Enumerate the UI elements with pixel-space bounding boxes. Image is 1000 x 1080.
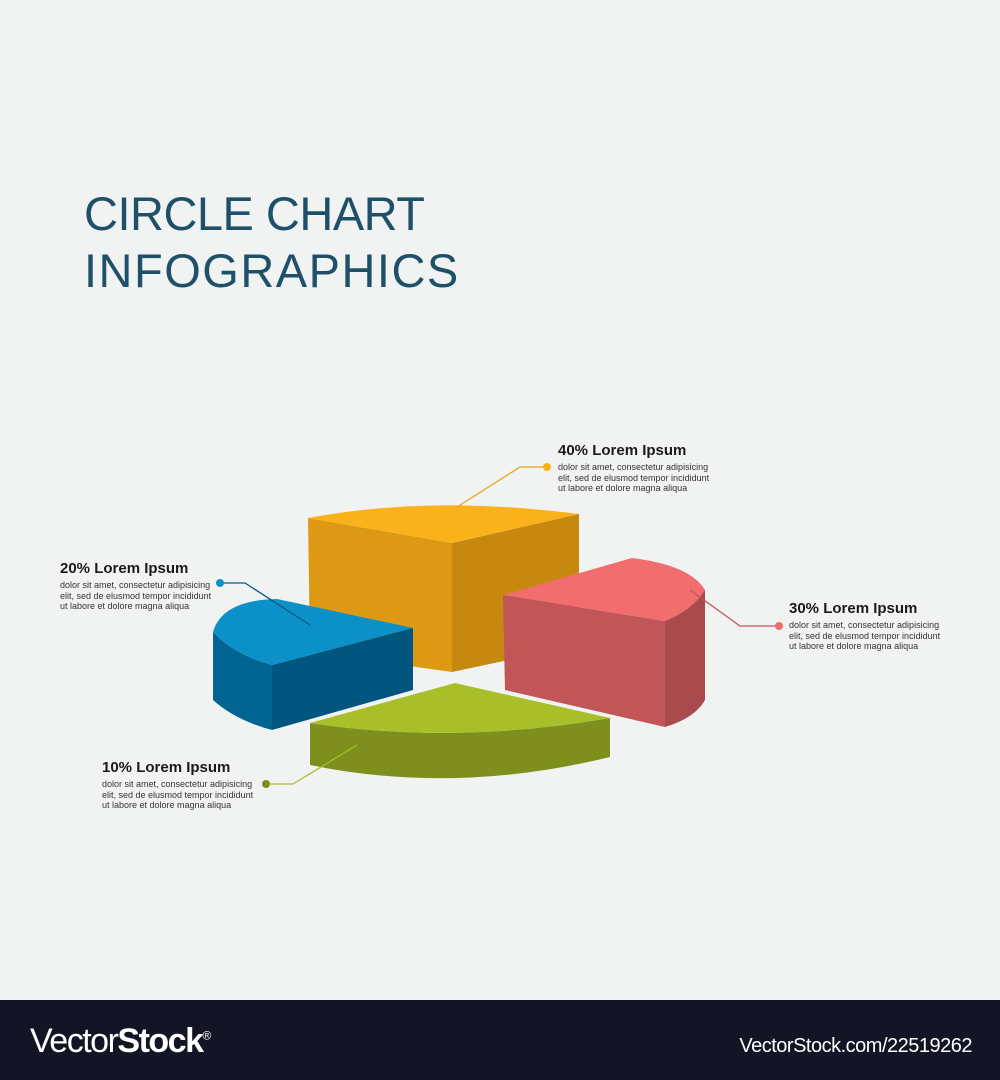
label 40%: dolor sit amet, consectetur adipisicing [558,462,708,472]
label 40%: ut labore et dolore magna aliqua [558,483,687,493]
slice: yellow 40% [308,505,579,672]
label 20% [60,560,212,611]
title: CIRCLE CHART [84,187,424,240]
label 10%: elit, sed de elusmod tempor incididunt [102,790,253,800]
label 20%: ut labore et dolore magna aliqua [60,601,189,611]
label 40% [558,442,710,493]
label 10%: 10% Lorem Ipsum [102,759,230,776]
label 20%: 20% Lorem Ipsum [60,560,188,577]
title: INFOGRAPHICS [84,244,460,297]
label 20%: elit, sed de elusmod tempor incididunt [60,590,211,600]
label 30%: 30% Lorem Ipsum [789,600,917,617]
label 10%: ut labore et dolore magna aliqua [102,800,231,810]
slice: green 10% [310,683,610,778]
footer bar: VectorStock.com/22519262 [739,1035,972,1057]
label 30% [789,600,940,651]
label 30%: ut labore et dolore magna aliqua [789,641,918,651]
connectors [220,467,779,784]
footer bar: VectorStock® [30,1022,210,1060]
title [84,187,460,297]
slice: red 30% [503,558,705,727]
label 30%: dolor sit amet, consectetur adipisicing [789,620,939,630]
label 20%: dolor sit amet, consectetur adipisicing [60,580,210,590]
label 30%: elit, sed de elusmod tempor incididunt [789,630,940,640]
label 10% [102,759,254,810]
label 10%: dolor sit amet, consectetur adipisicing [102,779,252,789]
label 40%: elit, sed de elusmod tempor incididunt [558,472,709,482]
slice: blue 20% [213,599,413,730]
label 40%: 40% Lorem Ipsum [558,442,686,459]
footer bar [0,1000,1000,1080]
